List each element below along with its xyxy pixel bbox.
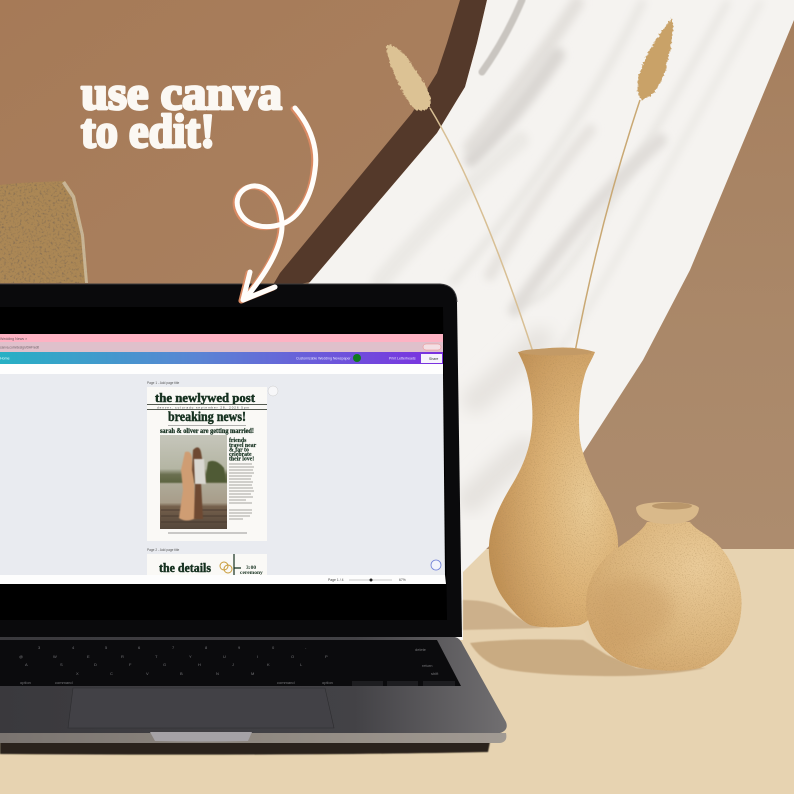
keyboard well [0,640,461,686]
keyboard legends: G [163,662,166,667]
share button [421,354,442,363]
keyboard legends: Y [189,654,192,659]
bottom rule [168,532,247,534]
masthead rules [147,404,267,410]
front lip [0,733,506,743]
keyboard legends: return [422,663,432,668]
timeline [234,554,241,576]
arrow keys [352,681,455,686]
ceremony time: 3:00 [246,565,256,571]
drape shadow on wall [270,0,487,290]
masthead: the newlywed post [155,390,256,405]
keyboard legends: X [76,671,79,676]
keyboard legends: N [216,671,219,676]
keyboard legends: C [110,671,113,676]
keyboard legends: A [25,662,28,667]
newspaper page 1 [147,387,267,541]
keyboard legends: J [232,662,234,667]
keyboard legends: 0 [272,645,275,650]
page 1 label: Page 1 - Add page title [147,381,179,385]
ceremony time: ceremony [240,570,263,576]
share label: Share [429,357,438,361]
pampas stem left [430,108,533,352]
zoom handle [370,578,372,582]
side headline: celebrate [229,452,252,458]
title: use canva to edit [81,67,282,158]
keyboard legends: 8 [205,645,208,650]
stone block [0,181,88,283]
keyboard legends: delete [415,647,427,652]
keyboard legends: - [305,645,307,650]
round vase neck and rim [636,502,699,524]
help button [431,560,441,570]
keyboard legends: B [180,671,183,676]
table shadow: round vase [470,639,706,676]
trackpad [68,688,334,728]
keyboard legends: U [223,654,226,659]
keyboard legends: 5 [105,645,108,650]
title: use canva to edit: to edit! [81,105,215,158]
keyboard legends: L [300,662,303,667]
keyboard legends: D [94,662,97,667]
avatar [353,354,361,362]
date line: denver, colorado september 28, 2026 5pm [157,406,250,410]
keyboard legends: M [251,671,254,676]
pampas head left [387,45,431,111]
side headline: friends [229,438,247,444]
white ruler strip [0,364,443,374]
keyboard legends: F [129,662,132,667]
groom [192,447,206,519]
update pill [423,344,441,350]
side headline: their love! [229,456,254,462]
keyboard legends: W [53,654,57,659]
toolbar home label: Home [0,356,10,360]
side headline: travel near [229,443,257,449]
keyboard legends: K [267,662,270,667]
pampas head right [638,18,673,100]
canva toolbar [0,352,443,364]
pampas stem right [575,100,640,352]
side headline: & far to [229,448,249,454]
couple photo [160,435,227,529]
toolbar document title: Customizable Wedding Newspaper [296,356,351,360]
table shadow: tall vase [463,600,545,630]
breaking news headline: breaking news! [168,410,246,425]
details heading: the details [159,560,211,575]
keyboard legends: S [60,662,63,667]
keyboard legends: R [121,654,124,659]
keyboard legends: 4 [72,645,75,650]
zoom percent: 67% [399,578,406,582]
keyboard legends: E [87,654,90,659]
keyboard legends: shift [431,671,439,676]
subhead: sarah & oliver are getting married! [160,427,254,435]
keyboard legends: command [55,680,73,685]
rings icon [220,562,232,573]
thumb notch [150,732,252,742]
laptop shadow [0,742,490,755]
footer page counter: Page 1 / 4 [328,578,344,582]
tall vase [489,348,618,627]
keyboard legends: 3 [38,645,41,650]
keyboard legends: @ [19,654,23,659]
laptop lid [0,284,462,637]
newspaper page 2 [147,554,267,576]
browser tab label: Wedding News × [0,337,27,341]
title: use canva to edit: use canva [81,67,282,120]
browser window [0,334,446,584]
keyboard legends: 6 [138,645,141,650]
print label: Print Letterheads [389,356,416,360]
keyboard legends: O [291,654,294,659]
background wall [0,0,794,560]
keyboard legends: 9 [238,645,241,650]
keyboard legends [19,645,439,685]
right wall panel [486,20,794,549]
table surface [0,549,794,794]
browser tab bar [0,334,443,342]
editor footer bar [0,575,446,584]
white drape [290,0,794,640]
laptop base [0,637,507,743]
keyboard legends: I [257,654,258,659]
bride [179,452,196,520]
keyboard legends: option [322,680,333,685]
keyboard legends: H [198,662,201,667]
headline rule [168,424,246,426]
keyboard legends: 7 [172,645,175,650]
browser address bar [0,342,443,352]
article body lines [229,464,254,519]
round vase [586,502,742,671]
editor canvas [0,374,445,576]
screen black surround [0,307,447,620]
keyboard legends: V [146,671,149,676]
keyboard legends: option [20,680,31,685]
curly arrow [235,108,316,301]
tall vase rim [520,348,592,356]
zoom slider [349,579,392,581]
corner comment button [268,386,278,396]
keyboard legends: command [277,680,295,685]
address text: canva.com/design/DAF/edit [0,346,39,350]
keyboard legends: P [325,654,328,659]
keyboard legends: T [155,654,158,659]
page 2 label: Page 2 - Add page title [147,548,179,552]
